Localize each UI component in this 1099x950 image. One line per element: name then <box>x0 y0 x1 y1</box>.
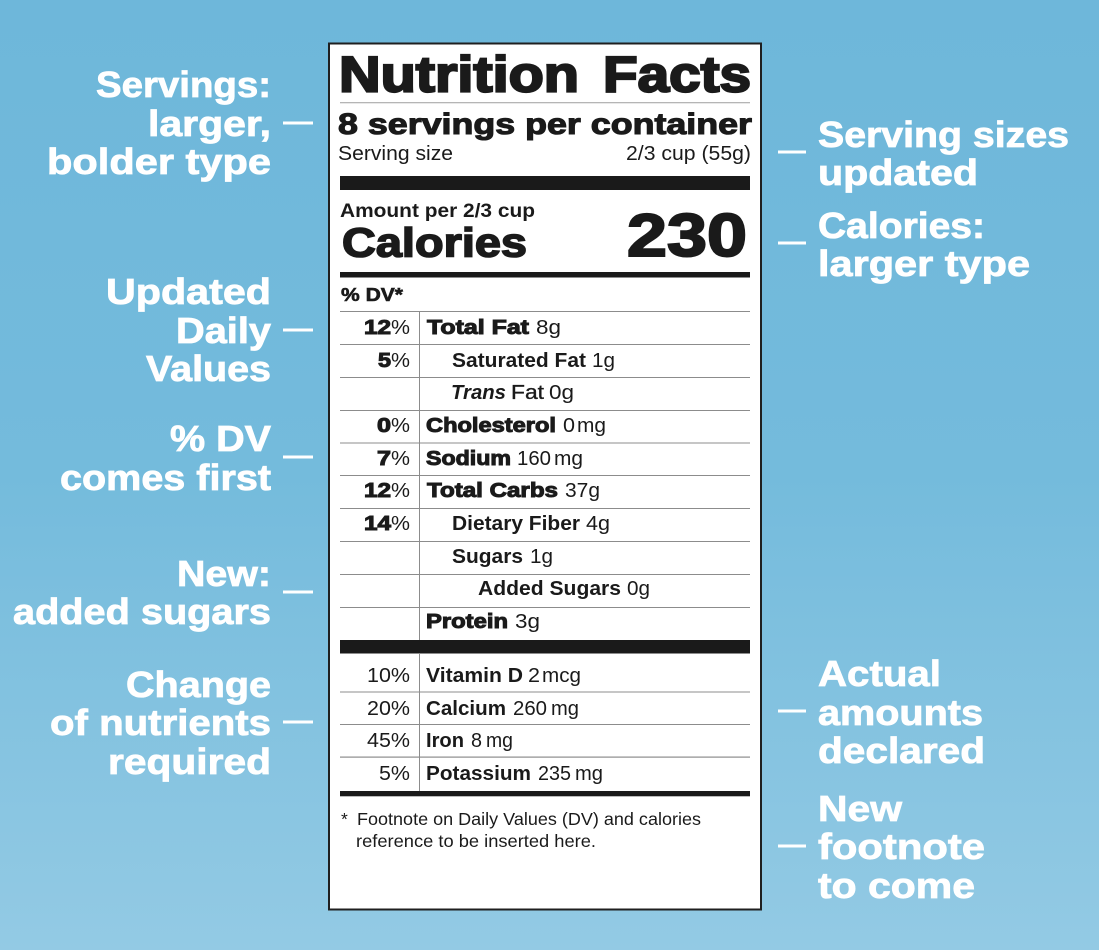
heading: Nutrition Facts <box>339 46 751 102</box>
row: cholesterol: % <box>391 415 410 437</box>
row: dietary fiber: 14 <box>364 513 392 535</box>
row: iron <box>367 730 513 752</box>
row: saturated fat: % <box>391 350 410 372</box>
callout: calories larger type <box>778 205 1030 284</box>
row: total carbs: Total Carbs <box>427 480 558 502</box>
row: trans fat: Fat <box>511 382 544 404</box>
callout: actual amounts declared <box>778 653 985 771</box>
row: calcium: 260 <box>513 698 547 720</box>
row: cholesterol: mg <box>577 415 606 437</box>
row: calcium: 20% <box>367 698 410 720</box>
row: iron: 8 <box>471 730 482 752</box>
callout: updated daily values: Daily <box>176 310 271 351</box>
callout: actual amounts declared: declared <box>818 730 985 771</box>
row: iron: mg <box>486 730 513 752</box>
callout: actual amounts declared: amounts <box>818 692 983 733</box>
row: saturated fat <box>378 350 615 372</box>
row: total fat: 8g <box>536 317 561 339</box>
row: saturated fat: 1g <box>592 350 615 372</box>
servings per container: 8 servings per container <box>338 108 752 141</box>
row: dietary fiber: 4g <box>586 513 610 535</box>
calories label: Calories <box>342 220 527 266</box>
row: vitamin D: Vitamin D <box>426 665 523 687</box>
panel: nutrition facts label <box>329 44 761 910</box>
callout: change of nutrients required: Change <box>126 664 271 705</box>
row: total fat <box>364 317 561 339</box>
callout: serving sizes updated <box>778 114 1069 193</box>
amount per serving: Amount per 2/3 cup <box>340 200 535 222</box>
callout: updated daily values <box>106 271 313 389</box>
row: sugars <box>452 546 553 568</box>
callout: new added sugars <box>13 553 313 632</box>
callout: calories larger type: Calories: <box>818 205 985 246</box>
serving size row: 2/3 cup (55g) <box>626 143 751 165</box>
callout: new footnote to come: New <box>818 788 903 829</box>
row: sodium: 160 <box>517 448 551 470</box>
row: trans fat <box>451 382 574 404</box>
row: vitamin D <box>367 665 581 687</box>
row: dietary fiber: % <box>391 513 410 535</box>
row: total carbs <box>364 480 600 502</box>
row: cholesterol: 0 <box>377 415 391 437</box>
row: dietary fiber: Dietary Fiber <box>452 513 580 535</box>
heading: Nutrition Facts: Nutrition <box>339 46 579 102</box>
row: potassium: 235 <box>538 763 571 785</box>
callout: servings larger, bolder type: Servings: <box>96 64 271 105</box>
callout: updated daily values: Updated <box>106 271 271 312</box>
callout: new footnote to come: footnote <box>818 826 985 867</box>
callout: change of nutrients required <box>50 664 313 782</box>
nutrient table <box>340 311 750 791</box>
footnote: * <box>341 809 348 829</box>
row: sugars: Sugars <box>452 546 523 568</box>
calories value: 230 <box>627 202 747 269</box>
row: total carbs: 12 <box>364 480 391 502</box>
row: iron: Iron <box>426 730 464 752</box>
row: total fat: Total Fat <box>427 317 529 339</box>
callout: new added sugars: New: <box>177 553 271 594</box>
row: sodium: 7 <box>377 448 391 470</box>
callout: servings larger, bolder type: larger, <box>148 103 271 144</box>
row: total carbs: % <box>391 480 410 502</box>
row: sodium: mg <box>554 448 583 470</box>
row: vitamin D: mcg <box>542 665 581 687</box>
callout: new footnote to come: to come <box>818 865 975 906</box>
row: sodium: Sodium <box>426 448 511 470</box>
callout: serving sizes updated: updated <box>818 152 978 193</box>
row: cholesterol: 0 <box>563 415 575 437</box>
row: total carbs: 37g <box>565 480 600 502</box>
callout: actual amounts declared: Actual <box>818 653 941 694</box>
row: iron: 45% <box>367 730 410 752</box>
row: potassium: mg <box>575 763 603 785</box>
row: trans fat: Trans <box>451 382 506 404</box>
footnote <box>341 809 701 851</box>
callout: new footnote to come <box>778 788 985 906</box>
row: sugars: 1g <box>530 546 553 568</box>
serving size row: Serving size <box>338 143 453 165</box>
row: cholesterol <box>377 415 606 437</box>
row: protein: Protein <box>426 611 508 633</box>
percent DV header: % DV* <box>341 285 403 305</box>
row: cholesterol: Cholesterol <box>426 415 556 437</box>
footnote: reference to be inserted here. <box>356 831 596 851</box>
row: calcium: mg <box>551 698 579 720</box>
row: calcium <box>367 698 579 720</box>
row: sodium <box>377 448 583 470</box>
row: sodium: % <box>391 448 410 470</box>
row: total fat: % <box>391 317 410 339</box>
callout: new added sugars: added sugars <box>13 591 271 632</box>
row: vitamin D: 10% <box>367 665 410 687</box>
row: added sugars: 0g <box>627 578 650 600</box>
heading: Nutrition Facts: Facts <box>603 46 751 102</box>
callout: updated daily values: Values <box>146 348 271 389</box>
row: potassium: 5% <box>379 763 410 785</box>
row: protein <box>426 611 540 633</box>
serving size row <box>338 143 751 165</box>
row: protein: 3g <box>515 611 540 633</box>
row: potassium: Potassium <box>426 763 531 785</box>
callout: percent DV comes first: % DV <box>170 418 271 459</box>
callout: servings larger, bolder type: bolder type <box>47 141 271 182</box>
row: dietary fiber <box>364 513 610 535</box>
row: calcium: Calcium <box>426 698 506 720</box>
row: saturated fat: 5 <box>378 350 391 372</box>
callout: serving sizes updated: Serving sizes <box>818 114 1069 155</box>
row: total fat: 12 <box>364 317 391 339</box>
row: added sugars: Added Sugars <box>478 578 621 600</box>
callout: calories larger type: larger type <box>818 243 1030 284</box>
row: vitamin D: 2 <box>528 665 540 687</box>
callout: change of nutrients required: of nutrients <box>50 702 271 743</box>
callout: percent DV comes first: comes first <box>60 457 271 498</box>
footnote: Footnote on Daily Values (DV) and calories <box>357 809 701 829</box>
row: potassium <box>379 763 603 785</box>
row: trans fat: 0g <box>549 382 574 404</box>
callout: servings larger, bolder type <box>47 64 313 182</box>
row: saturated fat: Saturated Fat <box>452 350 586 372</box>
callout: percent DV comes first <box>60 418 313 498</box>
callout: change of nutrients required: required <box>108 741 271 782</box>
